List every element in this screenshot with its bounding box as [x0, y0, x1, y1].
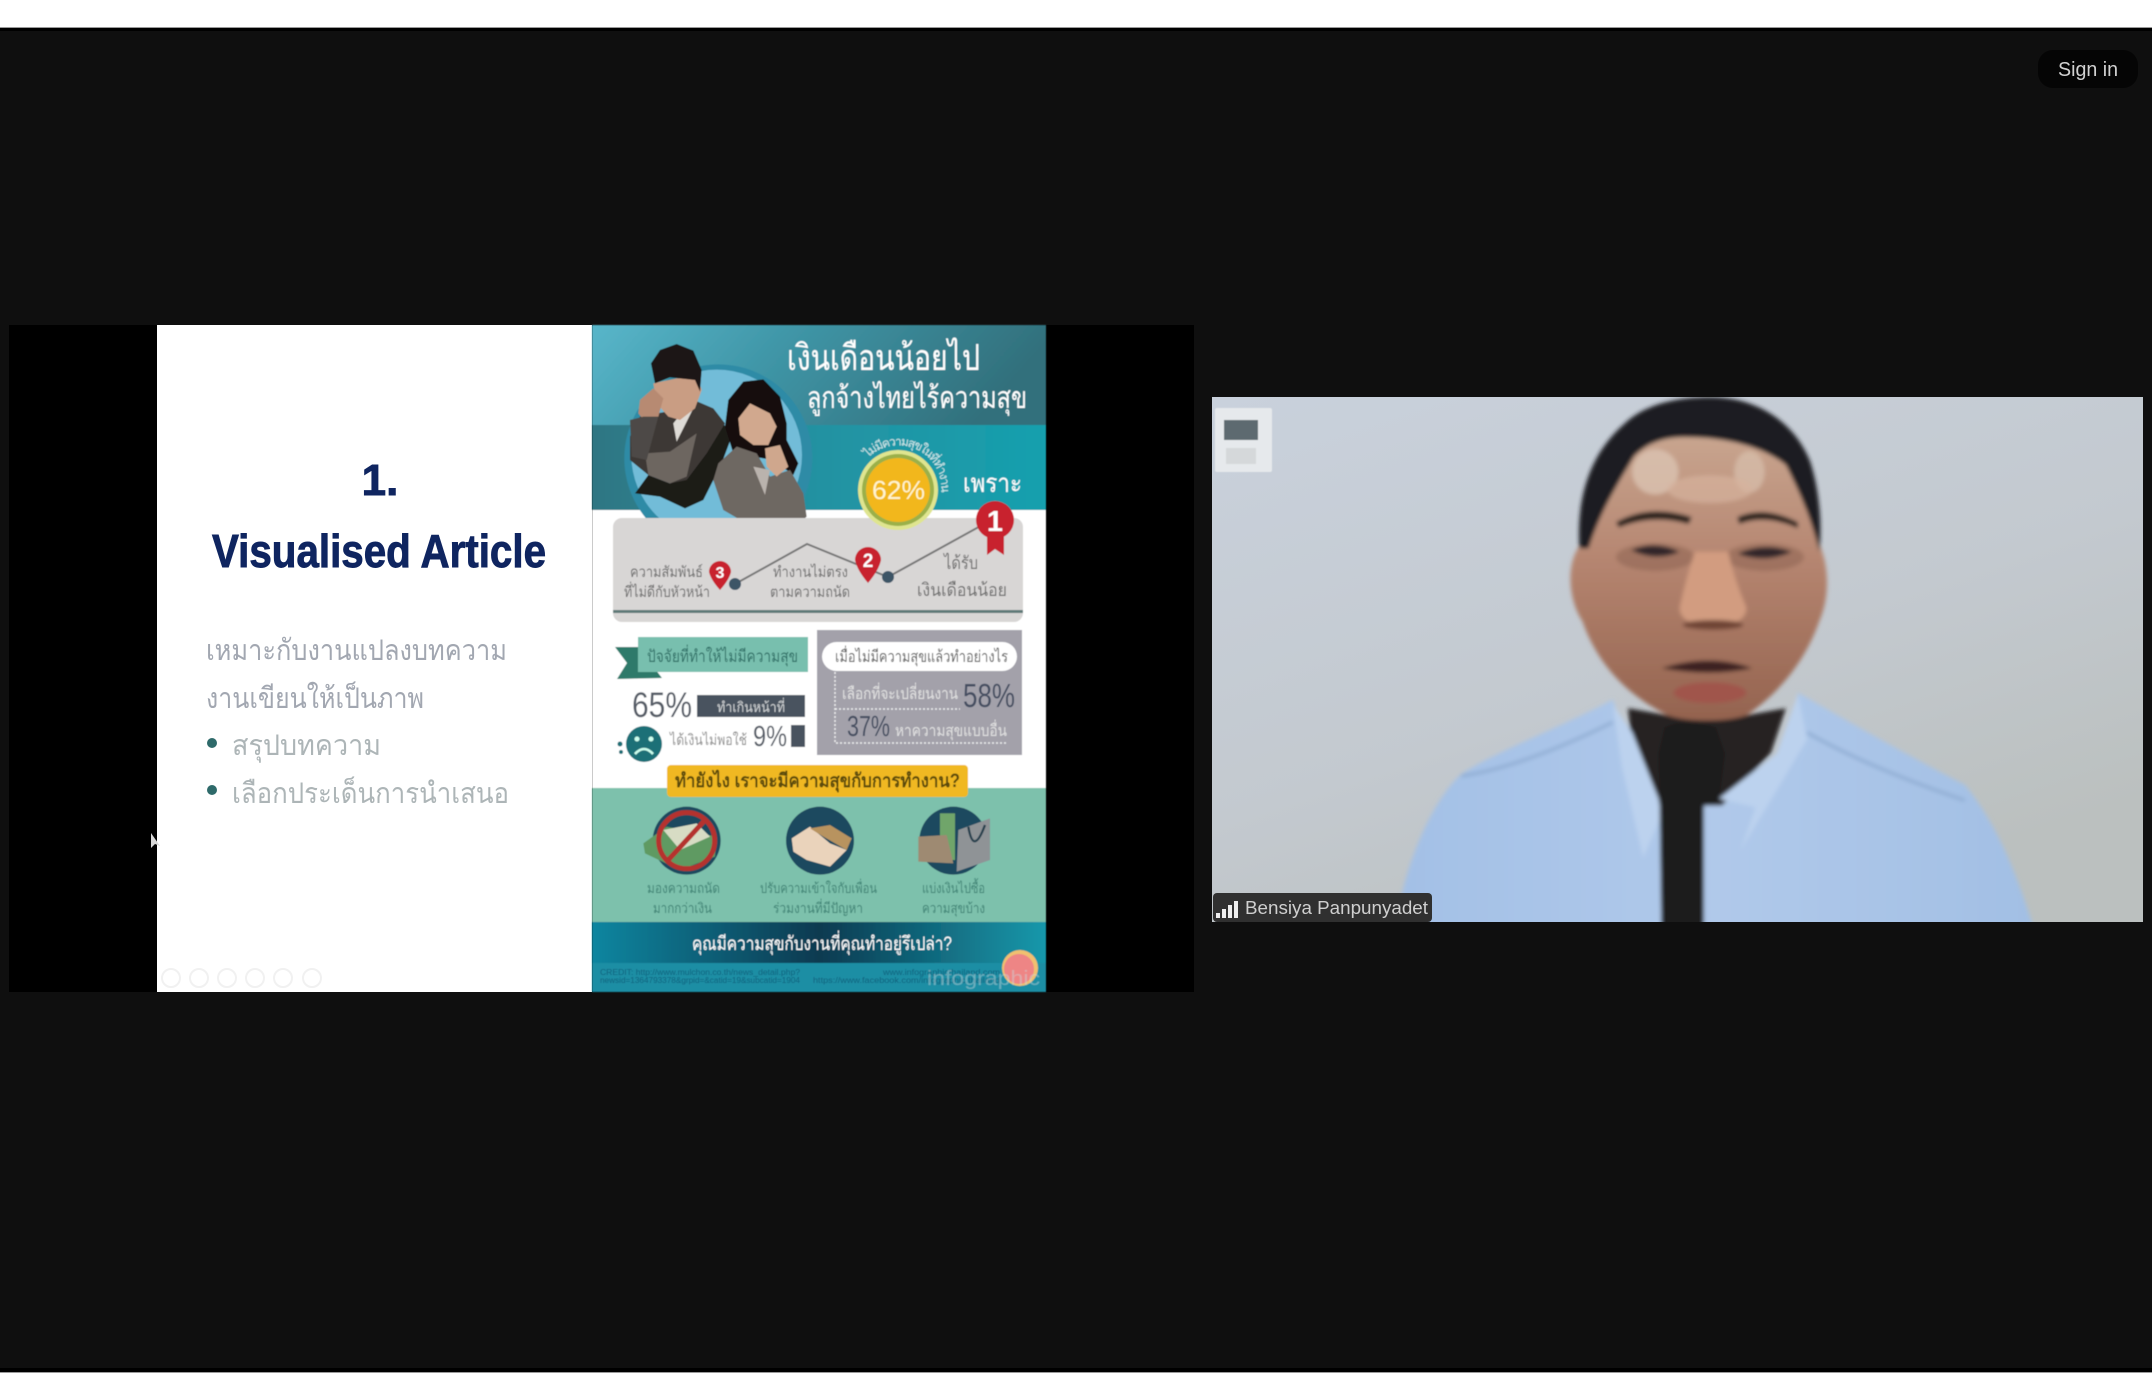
icon: mouse cursor [151, 833, 160, 848]
stat: 9 percent: 9% [753, 721, 787, 753]
stat: 65 percent: 65% [632, 686, 692, 725]
icon: handshake [786, 807, 854, 875]
badge: 62 percent [857, 438, 949, 530]
slide body text: เลือกประเด็นการนำเสนอ [232, 775, 509, 810]
tip labels: ร่วมงานที่มีปัญหา [773, 899, 863, 916]
infographic title: ลูกจ้างไทยไร้ความสุข [807, 380, 1027, 417]
tip labels: ความสุขบ้าง [922, 900, 985, 917]
illustration: stressed couple [624, 344, 812, 552]
slide body text: เหมาะกับงานแปลงบทความ [206, 635, 507, 667]
face [1571, 432, 1827, 720]
microphone [1658, 722, 1725, 941]
name tag [1213, 893, 1432, 922]
infographic header band [592, 325, 1046, 510]
because label: เพราะ [963, 468, 1022, 498]
tips banner [667, 765, 968, 797]
slide body text: งานเขียนให้เป็นภาพ [206, 680, 424, 715]
icon: shopping bags [918, 807, 990, 875]
under-eye shadows [1616, 543, 1695, 571]
icon: pin 2: 2 [863, 551, 873, 572]
panel: what people do [817, 630, 1022, 755]
eyebrows [1616, 511, 1798, 528]
icon: money prohibited [643, 807, 721, 875]
nose [1680, 552, 1746, 627]
icon: pin 3 [709, 561, 731, 590]
slide heading: 1. [362, 456, 398, 505]
slide body text [206, 635, 509, 810]
hair [1579, 397, 1820, 552]
infographic [591, 324, 1047, 993]
infographic title [787, 337, 1027, 417]
reason labels: ได้รับ [942, 552, 978, 573]
tip labels: มากกว่าเงิน [653, 900, 712, 916]
woman [725, 379, 798, 475]
tip labels: มองความถนัด [647, 880, 720, 896]
shirt seams [1461, 722, 1965, 800]
reason labels: ตามความถนัด [770, 584, 850, 601]
panel: what people do: 37% [847, 711, 890, 743]
panel: presenter video [1212, 397, 2143, 941]
tip labels [647, 878, 985, 917]
panel: what people do: 58% [963, 677, 1015, 714]
panel: what people do: หาความสุขแบบอื่น [895, 719, 1007, 741]
tips banner: ทำยังไง เราจะมีความสุขกับการทำงาน? [675, 769, 960, 793]
slide heading [212, 456, 546, 577]
infographic title: เงินเดือนน้อยไป [787, 337, 980, 378]
panel: reasons ranking [613, 518, 1023, 622]
sign in button [2038, 50, 2138, 88]
panel: infographic footer: newsid=1364793378&grpid=&catid=19&subcatid=1904 [600, 976, 801, 985]
icon: pin 3: 3 [716, 565, 725, 582]
eyes [1631, 545, 1792, 558]
sign in button: Sign in [2058, 59, 2118, 81]
reason labels: ทำงานไม่ตรง [773, 563, 848, 581]
panel: tips [592, 765, 1046, 922]
neck shadow [1628, 708, 1786, 806]
slide toolbar icons [162, 969, 321, 987]
stat: 9 percent [669, 721, 805, 753]
name tag: Bensiya Panpunyadet [1245, 898, 1428, 918]
panel: infographic footer [592, 922, 1046, 992]
stat: 65 percent: ทำเกินหน้าที่ [717, 698, 785, 715]
man [635, 423, 732, 508]
icon: ribbon 1 [976, 501, 1014, 555]
panel: infographic footer: www.infographicthailand.com [882, 968, 1000, 977]
ribbon heading: ปัจจัยที่ทำให้ไม่มีความสุข [647, 644, 798, 667]
icon: ribbon 1: 1 [987, 506, 1003, 538]
ribbon heading [615, 637, 808, 679]
icon: sad face [618, 726, 662, 762]
panel: what people do: เมื่อไม่มีความสุขแล้วทำอย่างไร [835, 645, 1008, 667]
reason labels [624, 552, 1007, 601]
reason labels: ที่ไม่ดีกับหัวหน้า [624, 581, 710, 601]
reason labels: ความสัมพันธ์ [630, 564, 703, 581]
panel: infographic footer: CREDIT: http://www.mulchon.co.th/news_detail.php? [600, 968, 801, 977]
collars [1613, 705, 1661, 858]
slide heading: Visualised Article [212, 525, 546, 577]
stat: 65 percent [632, 686, 805, 725]
presenter figure [1394, 397, 2038, 941]
tip labels: แบ่งเงินไปซื้อ [922, 878, 985, 896]
panel: what people do: เลือกที่จะเปลี่ยนงาน [842, 682, 958, 703]
badge: 62 percent: ไม่มีความสุขในที่ทำงาน [860, 438, 949, 494]
panel: infographic footer: https://www.facebook.com/infographic.thailand [813, 976, 1000, 985]
tip labels: ปรับความเข้าใจกับเพื่อน [760, 879, 877, 896]
line chart [729, 518, 995, 590]
icon: pin 2 [855, 547, 881, 583]
panel: infographic footer: คุณมีความสุขกับงานที่คุณทำอยู่รึเปล่า? [692, 930, 952, 956]
panel: unhappiness factors [615, 637, 808, 762]
panel: shared slide [9, 324, 1194, 993]
badge: 62 percent: 62% [872, 475, 925, 505]
wall thermostat [1215, 408, 1272, 472]
reason labels: เงินเดือนน้อย [917, 580, 1007, 600]
forehead highlights [1632, 449, 1678, 494]
stat: 9 percent: ได้เงินไม่พอใช้ [669, 731, 747, 749]
mouth [1661, 660, 1752, 673]
shirt [1394, 693, 2038, 941]
slide body text: สรุปบทความ [232, 730, 381, 763]
panel: infographic footer: infographic [927, 968, 1040, 990]
